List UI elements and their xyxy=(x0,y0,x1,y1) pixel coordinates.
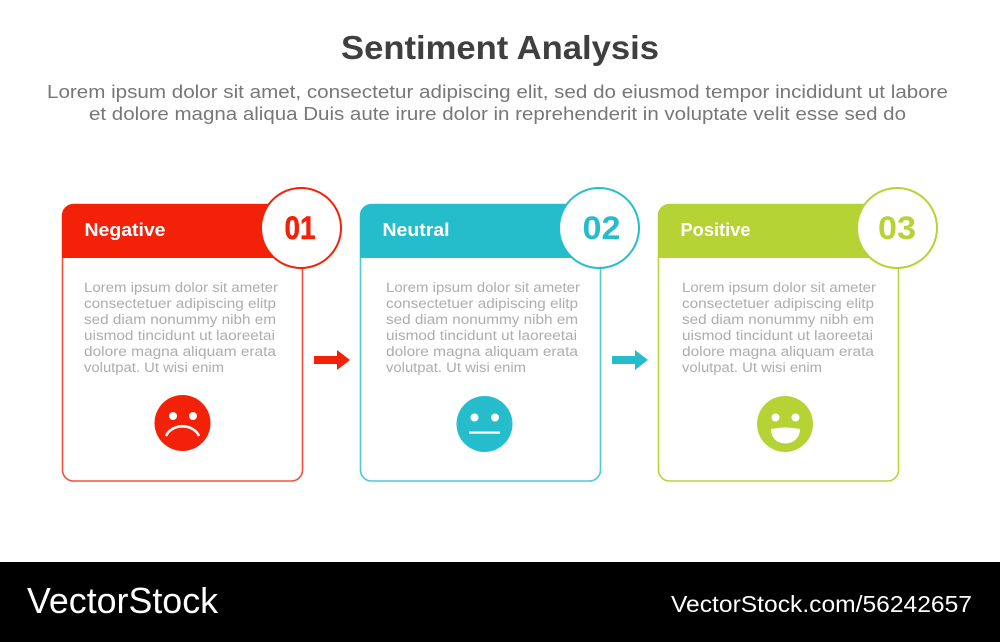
body text: negative: volutpat. Ut wisi enim xyxy=(84,360,224,375)
body text: negative xyxy=(84,280,279,375)
body text: positive: uismod tincidunt ut laoreetai xyxy=(682,328,873,343)
header bar: neutral xyxy=(360,204,588,258)
body text: neutral: consectetuer adipiscing elitp xyxy=(386,296,578,311)
footer logo text: VectorStock xyxy=(27,580,219,621)
heading: positive: Positive xyxy=(680,220,750,240)
footer url: VectorStock.com/56242657 xyxy=(671,591,972,617)
number badge 03 xyxy=(857,188,937,268)
subtitle text xyxy=(47,81,948,124)
icon: neutral face xyxy=(456,396,512,452)
arrow: negative to neutral xyxy=(314,350,350,370)
body text: positive: consectetuer adipiscing elitp xyxy=(682,296,874,311)
body text: neutral: dolore magna aliquam erata xyxy=(386,344,579,359)
icon: happy face xyxy=(757,396,813,452)
body text: neutral xyxy=(386,280,581,375)
number badge 02 xyxy=(559,188,639,268)
body text: positive xyxy=(682,280,877,375)
body text: negative: sed diam nonummy nibh em xyxy=(84,312,276,327)
icon: sad face xyxy=(154,395,210,451)
number badge 01: 01 xyxy=(284,210,316,246)
heading: neutral: Neutral xyxy=(382,220,450,240)
title: Sentiment Analysis xyxy=(341,29,659,66)
body text: neutral: uismod tincidunt ut laoreetai xyxy=(386,328,577,343)
body text: positive: Lorem ipsum dolor sit ameter xyxy=(682,280,877,295)
number badge 01 xyxy=(261,188,341,268)
panel: positive xyxy=(658,188,937,481)
body text: positive: dolore magna aliquam erata xyxy=(682,344,875,359)
number badge 03: 03 xyxy=(878,210,916,246)
header bar: positive xyxy=(658,204,886,258)
body text: neutral: Lorem ipsum dolor sit ameter xyxy=(386,280,581,295)
body text: neutral: sed diam nonummy nibh em xyxy=(386,312,578,327)
number badge 02: 02 xyxy=(582,210,620,246)
header bar: negative xyxy=(62,204,290,258)
body text: negative: dolore magna aliquam erata xyxy=(84,344,277,359)
body text: negative: uismod tincidunt ut laoreetai xyxy=(84,328,275,343)
footer bar xyxy=(0,562,1000,642)
body text: negative: Lorem ipsum dolor sit ameter xyxy=(84,280,279,295)
subtitle text: Lorem ipsum dolor sit amet, consectetur adipiscing elit, sed do eiusmod tempor incididunt ut labore xyxy=(47,81,948,102)
panel: negative xyxy=(62,188,341,481)
heading: negative: Negative xyxy=(84,220,166,240)
body text: negative: consectetuer adipiscing elitp xyxy=(84,296,276,311)
panel: neutral xyxy=(360,188,639,481)
subtitle text: et dolore magna aliqua Duis aute irure dolor in reprehenderit in voluptate velit esse sed do xyxy=(89,103,906,124)
body text: positive: volutpat. Ut wisi enim xyxy=(682,360,822,375)
body text: positive: sed diam nonummy nibh em xyxy=(682,312,874,327)
body text: neutral: volutpat. Ut wisi enim xyxy=(386,360,526,375)
arrow: neutral to positive xyxy=(612,350,648,370)
